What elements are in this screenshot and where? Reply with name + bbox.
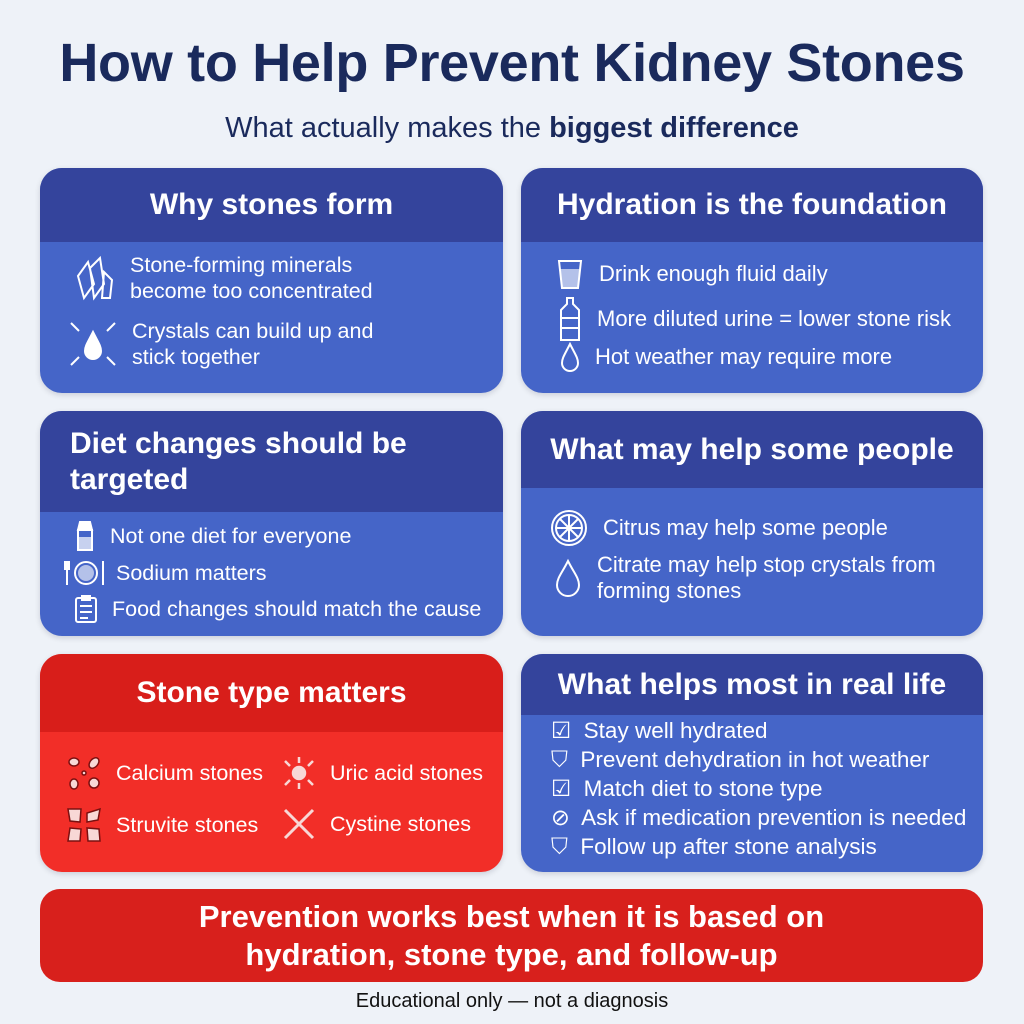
item: citrus <box>551 510 888 546</box>
item: struvite: Struvite stones <box>116 813 258 837</box>
bottom banner: hydration, stone type, and follow-up <box>245 936 778 972</box>
heading: Hydration is the foundation <box>557 188 947 221</box>
subtitle: What actually makes the biggest difference <box>225 112 799 144</box>
bottom banner: Prevention works best when it is based on <box>199 898 824 934</box>
item: clipboard: Food changes should match the cause <box>112 597 481 621</box>
item: bottle <box>560 297 951 341</box>
item: drink: Drink enough fluid daily <box>599 261 828 286</box>
title: How to Help Prevent Kidney Stones <box>59 33 965 93</box>
item: minerals: become too concentrated <box>130 279 373 303</box>
checklist: ☑ Stay well hydrated <box>551 718 768 743</box>
item: cystine: Cystine stones <box>330 812 471 836</box>
item: uric acid <box>284 757 483 789</box>
checklist: ⊘ Ask if medication prevention is needed <box>551 805 966 830</box>
heading <box>521 654 983 715</box>
checklist: ⛉ Follow up after stone analysis <box>551 834 877 859</box>
item: crystals <box>70 319 373 369</box>
footer note: Educational only — not a diagnosis <box>356 990 668 1012</box>
item: minerals <box>76 253 373 303</box>
item: crystals: stick together <box>132 345 260 369</box>
item: cystine <box>284 809 471 839</box>
heading: Diet changes should be <box>70 426 407 460</box>
panel: what may help <box>521 411 983 636</box>
panel: what helps most <box>521 654 983 872</box>
bottom banner <box>40 889 983 982</box>
item: uric acid: Uric acid stones <box>330 761 483 785</box>
item: salt: Not one diet for everyone <box>110 524 351 548</box>
heading: What helps most in real life <box>558 668 946 700</box>
heading <box>40 168 503 242</box>
panel: stone type matters <box>40 654 503 872</box>
item: citrate: forming stones <box>597 578 741 603</box>
checklist <box>551 718 966 859</box>
panel: hydration <box>521 168 983 393</box>
checklist: ⛉ Prevent dehydration in hot weather <box>551 747 929 772</box>
item: citrate: Citrate may help stop crystals from <box>597 552 936 577</box>
item: calcium <box>68 757 263 790</box>
heading <box>40 654 503 732</box>
checklist: ☑ Match diet to stone type <box>551 776 823 801</box>
item: citrus: Citrus may help some people <box>603 515 888 540</box>
heading: Why stones form <box>150 188 393 221</box>
item: struvite <box>67 808 258 842</box>
panel: diet <box>40 411 503 636</box>
heading: targeted <box>70 462 188 496</box>
heading <box>521 411 983 488</box>
item: citrate <box>556 552 936 603</box>
item: crystals: Crystals can build up and <box>132 319 373 343</box>
item: calcium: Calcium stones <box>116 761 263 785</box>
heading: Stone type matters <box>136 676 407 709</box>
heading <box>521 168 983 242</box>
heading <box>40 411 503 512</box>
item: hot weather: Hot weather may require more <box>595 344 892 369</box>
item: plate: Sodium matters <box>116 561 267 585</box>
panel: why stones form <box>40 168 503 393</box>
item: minerals: Stone-forming minerals <box>130 253 352 277</box>
heading: What may help some people <box>550 432 954 466</box>
item: bottle: More diluted urine = lower stone risk <box>597 306 951 331</box>
